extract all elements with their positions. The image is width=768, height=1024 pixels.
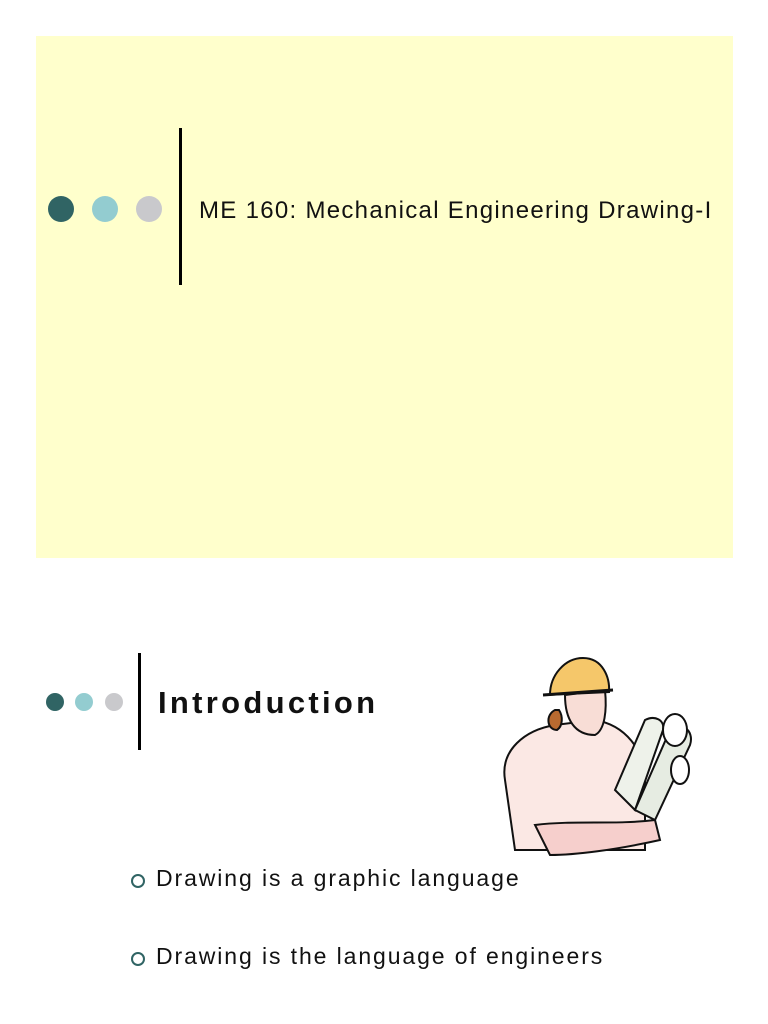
panel: introduction slide bbox=[46, 653, 604, 969]
icon: light dot bbox=[75, 693, 93, 711]
icon: grey dot bbox=[105, 693, 123, 711]
panel: title slide bbox=[36, 36, 733, 558]
icon: dark dot bbox=[46, 693, 64, 711]
heading: Introduction bbox=[158, 685, 378, 720]
divider line bbox=[179, 128, 182, 285]
bullet 1 bbox=[131, 865, 521, 891]
panel: introduction slide: Drawing is a graphic language bbox=[156, 865, 521, 891]
title: ME 160: Mechanical Engineering Drawing-I bbox=[199, 197, 713, 224]
icon: dark dot bbox=[48, 196, 74, 222]
icon: light dot bbox=[92, 196, 118, 222]
divider line bbox=[138, 653, 141, 750]
illustration: engineer with blueprints bbox=[503, 657, 692, 856]
panel: introduction slide: Drawing is the language of engineers bbox=[156, 943, 604, 969]
icon: grey dot bbox=[136, 196, 162, 222]
bullet 2 bbox=[131, 943, 604, 969]
